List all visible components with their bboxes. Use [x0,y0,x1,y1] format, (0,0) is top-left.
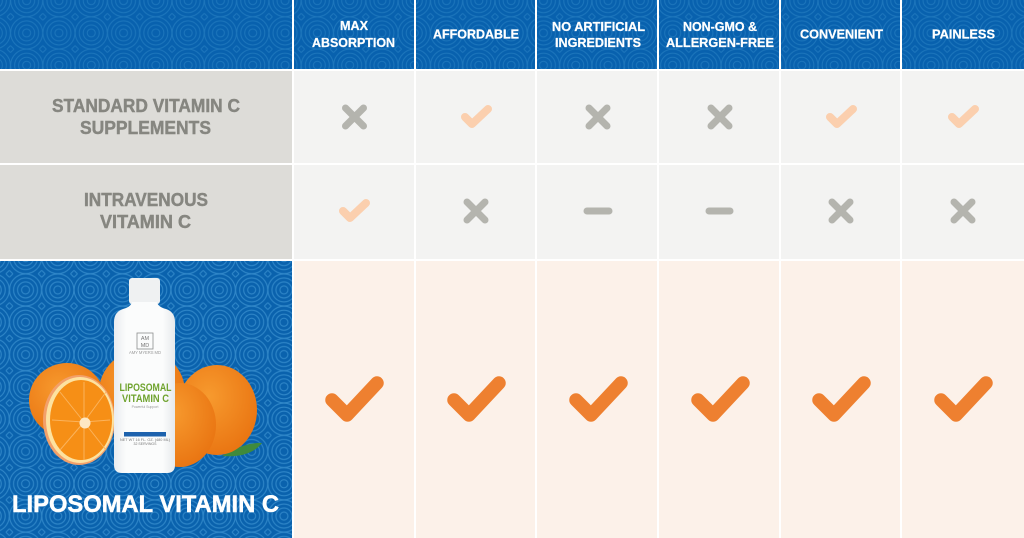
icon: bottle [114,278,175,473]
row marks: intravenous vitamin C [343,202,972,220]
icon: left orange [29,363,105,437]
icon: halved orange [43,375,115,465]
column headers: PAINLESS [932,26,995,42]
icon: leaf [222,443,262,456]
panel: header pattern corner [0,0,292,69]
column headers: MAX [340,18,368,33]
icon: bottle: AM [141,336,150,342]
column headers: AFFORDABLE [433,26,519,42]
icon: bottle: Powerful Support [132,405,158,409]
row marks: standard vitamin C [346,108,975,126]
icon: bottle: NET WT 16 FL. OZ. (480 ML) [120,438,171,442]
column headers: ALLERGEN-FREE [666,35,774,50]
row marks: liposomal vitamin C [332,383,986,415]
panel: row label intravenous vitamin C: INTRAVENOUS [84,189,208,210]
panel: row label standard vitamin C: STANDARD VITAMIN C [52,95,240,116]
icon: bottle: MD [141,343,149,349]
icon: back orange [99,350,185,434]
icon: bottle: VITAMIN C [122,393,169,405]
column headers: INGREDIENTS [555,35,641,50]
icon: front right orange [144,383,216,467]
icon: bottle: LIPOSOMAL [120,382,172,394]
column headers: CONVENIENT [800,26,883,42]
icon: bottle: AMY MYERS MD [129,350,161,355]
icon: bottle: 32 SERVINGS [134,442,157,446]
product name: LIPOSOMAL VITAMIN C [12,491,279,518]
icon: right orange [177,365,257,455]
column headers: NON-GMO & [683,19,757,34]
column headers: NO ARTIFICIAL [552,19,645,34]
panel: row label standard vitamin C [0,71,292,163]
panel: liposomal highlighted cells [294,261,1024,538]
panel: row label intravenous vitamin C [0,165,292,259]
panel: row label intravenous vitamin C: VITAMIN C [100,211,191,232]
panel: grey comparison cells [294,71,1024,259]
panel: row label standard vitamin C: SUPPLEMENTS [80,117,211,138]
column headers [294,0,1024,69]
column headers: ABSORPTION [312,35,395,50]
panel: liposomal vitamin C product [0,261,292,538]
